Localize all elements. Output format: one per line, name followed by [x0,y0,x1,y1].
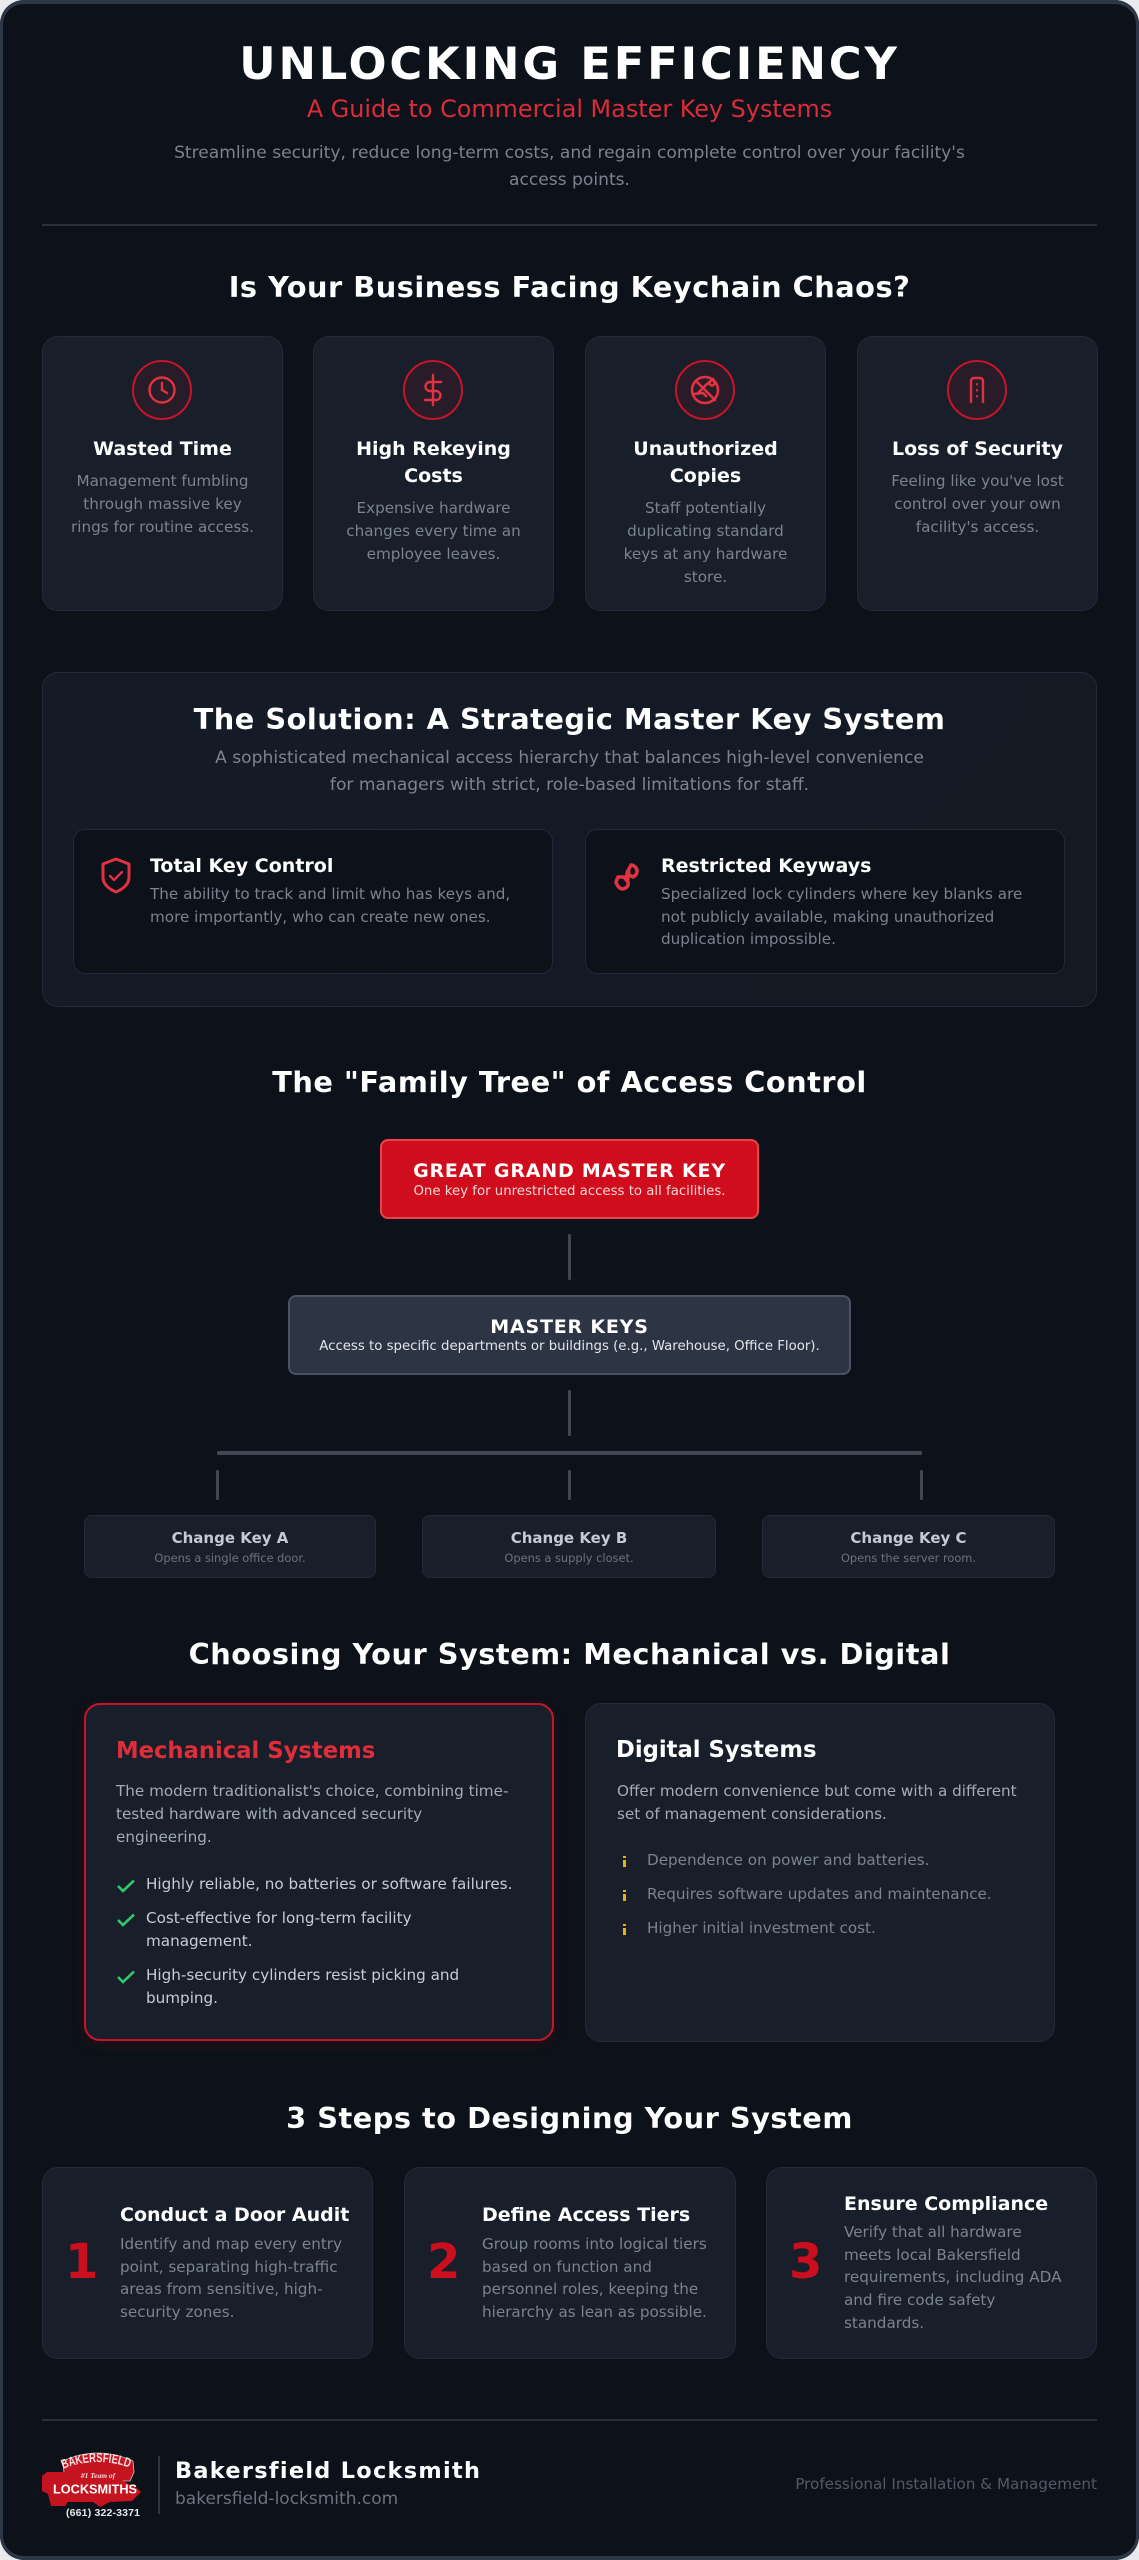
icon: door [947,360,1007,420]
benefit text [146,1909,412,1950]
step number: 2 [427,2234,460,2290]
panel: mechanical systems [84,1703,554,2041]
panel text [116,1782,508,1846]
step number: 3 [789,2234,822,2290]
panel: wasted time [42,336,283,611]
icon: key [614,863,639,891]
sub-card: restricted keyways [585,829,1065,974]
footer brand name: Bakersfield Locksmith [175,2458,481,2484]
step text [844,2223,1062,2332]
card title: Unauthorized [633,438,778,460]
solution heading: The Solution: A Strategic Master Key System [194,702,945,736]
benefit text: management. [146,1932,253,1950]
panel: the solution [42,672,1097,1007]
sub-card text: The ability to track and limit who has keys and, [150,885,510,903]
node title: Change Key A [172,1529,288,1547]
panel text: Offer modern convenience but come with a different [617,1782,1017,1800]
logo: bakersfield locksmiths: #1 Team of [80,2471,117,2480]
step text: hierarchy as lean as possible. [482,2303,707,2321]
panel text: engineering. [116,1828,212,1846]
step text: Verify that all hardware [844,2223,1022,2241]
step text: standards. [844,2314,924,2332]
step text [482,2235,707,2321]
sub-card title: Restricted Keyways [661,855,871,877]
node title: Change Key B [511,1529,627,1547]
icon: warning mark [623,1924,626,1935]
icon: dollar [403,360,463,420]
step text: requirements, including ADA [844,2268,1061,2286]
node title: MASTER KEYS [490,1316,649,1338]
panel: step 3 [766,2167,1097,2359]
card title [356,438,511,487]
icon: shield check [102,858,130,894]
intro text [174,142,965,190]
icon: warning mark [623,1890,626,1901]
node: great grand master key [380,1139,759,1219]
consideration text: Dependence on power and batteries. [647,1851,929,1869]
heading: mechanical vs digital: Choosing Your System: Mechanical vs. Digital [189,1637,950,1671]
footer tagline: Professional Installation & Management [795,2475,1097,2493]
card text: Expensive hardware [356,498,511,516]
card text [891,472,1064,536]
step title: Conduct a Door Audit [120,2204,349,2226]
benefit text: bumping. [146,1989,218,2007]
panel: rekeying costs [313,336,554,611]
step text: Identify and map every entry [120,2235,342,2253]
sub-card title: Total Key Control [150,855,333,877]
panel: step 2 [404,2167,736,2359]
panel text: The modern traditionalist's choice, combining time- [116,1782,508,1800]
panel text: tested hardware with advanced security [116,1805,422,1823]
card text: Staff potentially [645,498,766,516]
card text: changes every time an [346,522,521,540]
logo: bakersfield locksmiths: LOCKSMITHS [53,2482,137,2496]
logo: bakersfield locksmiths: (661) 322-3371 [66,2507,140,2519]
node text: Opens a single office door. [154,1551,306,1565]
step title: Ensure Compliance [844,2193,1048,2215]
card title: Wasted Time [93,438,232,460]
step title: Define Access Tiers [482,2204,690,2226]
card title: Loss of Security [892,438,1063,460]
sub-card text: more importantly, who can create new ones. [150,908,491,926]
card text: control over your own [894,494,1061,512]
card text: Management fumbling [76,472,248,490]
node text: Access to specific departments or buildings (e.g., Warehouse, Office Floor). [319,1339,820,1354]
card text [71,472,254,536]
node title: GREAT GRAND MASTER KEY [413,1160,726,1182]
sub-card: total key control [73,829,553,974]
icon: no copies [675,360,735,420]
intro text: access points. [509,170,630,190]
card text: employee leaves. [367,544,500,562]
icon: clock [132,360,192,420]
card text: Feeling like you've lost [891,472,1064,490]
card title: Costs [404,465,463,487]
panel title: Digital Systems [616,1737,816,1763]
panel: unauthorized copies [585,336,826,611]
solution text: for managers with strict, role-based limitations for staff. [330,775,809,795]
solution text [215,748,924,795]
node: change key A [84,1515,376,1578]
step number: 1 [65,2234,98,2290]
step text [120,2235,342,2321]
step text: security zones. [120,2303,234,2321]
sub-card text: not publicly available, making unauthorized [661,908,994,926]
node title: Change Key C [850,1529,967,1547]
benefit text: Cost-effective for long-term facility [146,1909,412,1927]
icon: check [117,1880,135,1893]
node text: Opens a supply closet. [504,1551,634,1565]
consideration text: Higher initial investment cost. [647,1919,876,1937]
footer website: bakersfield-locksmith.com [175,2489,398,2509]
sub-card text [150,885,510,926]
node: change key B [422,1515,716,1578]
title: UNLOCKING EFFICIENCY [239,37,900,90]
benefit text: Highly reliable, no batteries or software failures. [146,1875,512,1893]
solution text: A sophisticated mechanical access hierarchy that balances high-level convenience [215,748,924,768]
card title [633,438,778,487]
consideration text: Requires software updates and maintenance. [647,1885,992,1903]
panel: step 1 [42,2167,373,2359]
sub-card text: duplication impossible. [661,930,836,948]
step text: areas from sensitive, high- [120,2280,323,2298]
benefit text: High-security cylinders resist picking and [146,1966,459,1984]
subtitle: A Guide to Commercial Master Key Systems [307,95,832,123]
panel: loss of security [857,336,1098,611]
node text: One key for unrestricted access to all facilities. [413,1184,726,1199]
heading: keychain chaos: Is Your Business Facing Keychain Chaos? [229,270,910,304]
card text: facility's access. [916,518,1039,536]
card text [346,498,521,562]
step text: meets local Bakersfield [844,2246,1021,2264]
card text: duplicating standard [627,522,784,540]
panel: digital systems [585,1703,1055,2042]
step text: personnel roles, keeping the [482,2280,698,2298]
logo: bakersfield locksmiths [42,2452,141,2519]
icon: warning mark [623,1856,626,1867]
list: considerations [623,1851,992,1937]
icon: check [117,1914,135,1927]
panel title: Mechanical Systems [116,1738,375,1764]
step text: based on function and [482,2258,652,2276]
node: change key C [762,1515,1055,1578]
card text: store. [684,568,727,586]
step text: Group rooms into logical tiers [482,2235,707,2253]
card text: through massive key [83,494,242,512]
sub-card text [661,885,1022,948]
node: master keys [288,1295,851,1375]
heading: three steps: 3 Steps to Designing Your System [286,2101,853,2135]
step text: point, separating high-traffic [120,2258,338,2276]
benefit text [146,1966,459,2007]
node text: Opens the server room. [841,1551,976,1565]
card text: keys at any hardware [624,544,787,562]
icon: check [117,1970,135,1984]
step text: and fire code safety [844,2291,995,2309]
card text: rings for routine access. [71,518,254,536]
panel text: set of management considerations. [617,1805,887,1823]
list: benefits [117,1875,512,2007]
panel text [617,1782,1017,1823]
card title: High Rekeying [356,438,511,460]
heading: family tree: The "Family Tree" of Access Control [272,1065,867,1099]
intro text: Streamline security, reduce long-term costs, and regain complete control over your facility's [174,142,965,162]
card text [624,498,787,586]
chart: key hierarchy tree [84,1139,1055,1578]
card title: Copies [670,465,741,487]
sub-card text: Specialized lock cylinders where key blanks are [661,885,1022,903]
